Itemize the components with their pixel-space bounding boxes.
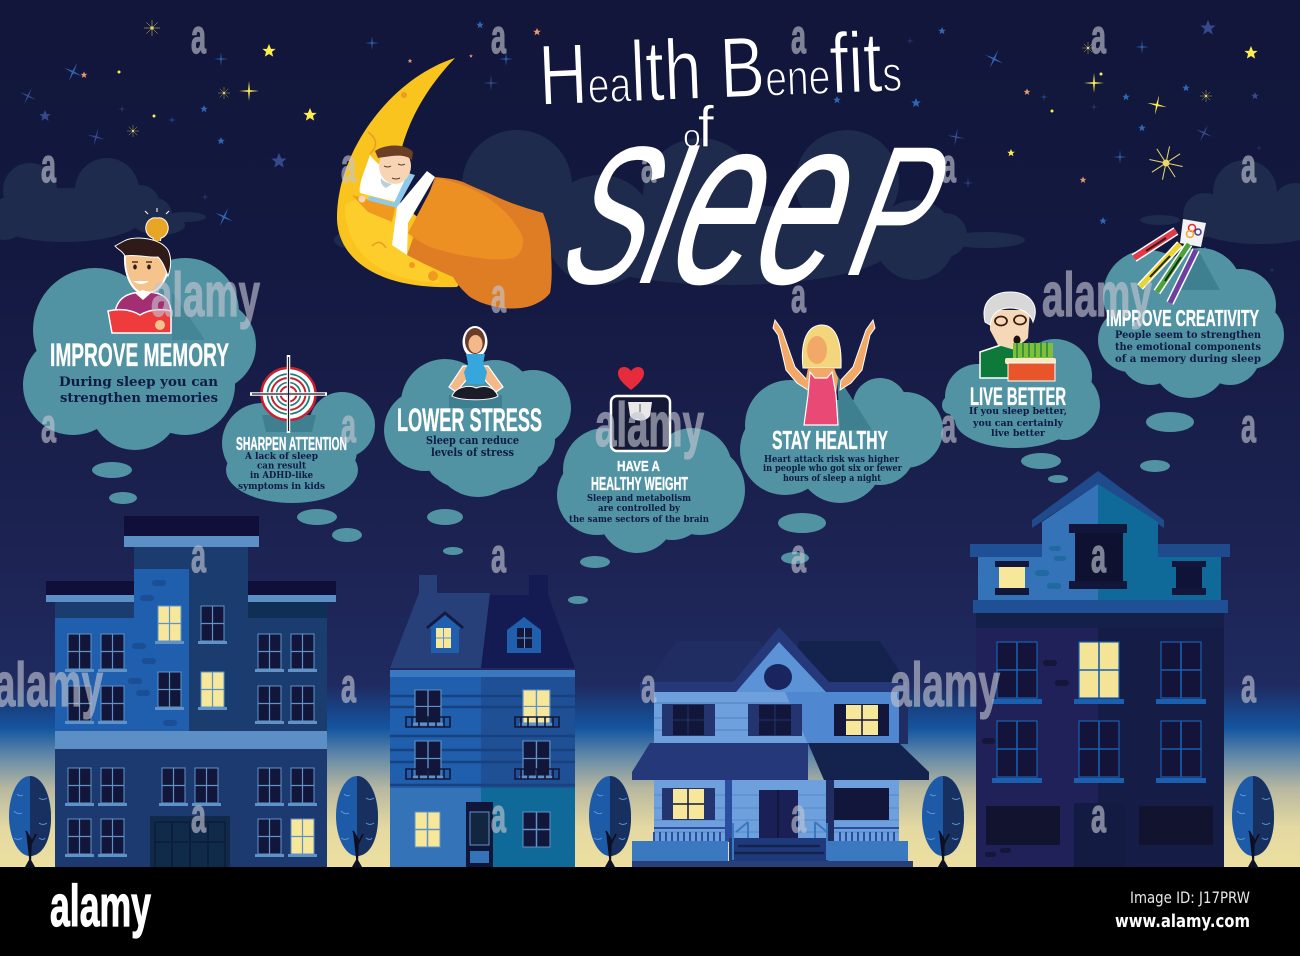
title: Sleep: P: [824, 109, 976, 315]
heading and text: can result: [257, 460, 307, 472]
thought cloud: stay healthy: [740, 320, 943, 503]
watermark words and letters over artwork: a: [641, 660, 656, 713]
watermark words and letters over artwork: a: [491, 270, 506, 323]
thought cloud: improve creativity: [1098, 219, 1284, 472]
watermark words and letters over artwork: alamy: [1042, 261, 1152, 330]
heading and text: IMPROVE MEMORY: [50, 337, 229, 373]
thought cloud: sharpen attention: [222, 355, 375, 542]
heading and text: A lack of sleep: [244, 451, 318, 462]
blanket: [392, 171, 552, 308]
watermark words and letters over artwork: a: [341, 400, 356, 453]
heading and text: [763, 425, 903, 484]
heading and text: of a memory during sleep: [1115, 353, 1261, 365]
dark cloud: behind title: [334, 130, 1025, 285]
icon: old man with birthday cake: [980, 292, 1056, 381]
watermark words and letters over artwork: a: [941, 400, 956, 453]
sleeping man: [358, 146, 415, 208]
footer bar: [0, 867, 1300, 956]
watermark letters: a: [491, 11, 506, 64]
stars: [16, 20, 1275, 273]
heading and text: During sleep you can: [59, 375, 219, 390]
title: of: of: [683, 95, 715, 160]
heading and text: [50, 337, 229, 406]
moon: [337, 58, 475, 287]
watermark words and letters over artwork: a: [41, 400, 56, 453]
heading and text: LIVE BETTER: [970, 383, 1066, 411]
heading and text: Heart attack risk was higher: [764, 454, 900, 465]
watermark words and letters over artwork: a: [491, 790, 506, 843]
dark cloud: right: [1140, 160, 1300, 244]
heading and text: [236, 434, 347, 492]
watermark words and letters over artwork: a: [1241, 660, 1256, 713]
watermark letters: a: [1091, 11, 1106, 64]
building 2: townhouse with dormers: [390, 575, 575, 867]
watermark words and letters over artwork: alamy: [151, 261, 260, 330]
heading and text: Sleep can reduce: [426, 434, 519, 447]
icon: man reading with light bulb: [108, 208, 205, 340]
thought cloud: improve memory: [23, 208, 256, 504]
watermark words and letters over artwork: alamy: [890, 651, 1000, 720]
heading and text: in people who got six or fewer: [763, 463, 903, 474]
watermark letters: a: [791, 11, 806, 64]
icon: target: [250, 355, 327, 433]
heading and text: symptoms in kids: [238, 481, 325, 492]
watermark words and letters over artwork: a: [1091, 530, 1106, 583]
watermark words and letters over artwork: a: [1241, 400, 1256, 453]
watermark words and letters over artwork: a: [791, 270, 806, 323]
trees: [9, 776, 1274, 867]
heading and text: LOWER STRESS: [397, 402, 542, 438]
footer bar: Image ID: J17PRW: [1130, 888, 1250, 907]
heading and text: the same sectors of the brain: [569, 514, 709, 525]
building 1: apartment block: [46, 516, 336, 867]
heading and text: [969, 383, 1067, 439]
footer bar: alamy: [50, 874, 151, 939]
icon: crayons and colour card: [1134, 219, 1220, 303]
heading and text: STAY HEALTHY: [772, 425, 888, 455]
heading and text: HEALTHY WEIGHT: [591, 474, 688, 494]
watermark letters: a: [641, 140, 656, 193]
thought cloud: lower stress: [384, 326, 571, 555]
heading and text: Sleep and metabolism: [587, 493, 691, 504]
watermark words and letters over artwork: a: [191, 530, 206, 583]
building 3: porch house: [632, 627, 929, 867]
watermark words and letters over artwork: a: [491, 530, 506, 583]
watermark words and letters over artwork: a: [341, 660, 356, 713]
icon: woman raising arms: [773, 320, 875, 430]
heading and text: in ADHD-like: [250, 470, 313, 481]
heading and text: the emotional components: [1115, 341, 1261, 353]
title: Health Benefits: Health Benefits: [537, 14, 903, 124]
icon: weighing scale: [611, 396, 670, 451]
heading and text: SHARPEN ATTENTION: [236, 434, 347, 454]
heading and text: you can certainly: [972, 418, 1063, 429]
heading and text: strengthen memories: [60, 391, 218, 406]
heading and text: live better: [991, 428, 1046, 439]
watermark words and letters over artwork: a: [1091, 790, 1106, 843]
building 4: tall house with gabled attic: [970, 471, 1230, 867]
title: Sleep: Slee: [536, 67, 902, 335]
heading and text: If you sleep better,: [969, 406, 1067, 417]
watermark letters: a: [41, 140, 56, 193]
watermark letters: [41, 11, 1256, 193]
watermark words and letters over artwork: a: [341, 140, 356, 193]
heading and text: [397, 402, 542, 459]
watermark words and letters over artwork: a: [191, 790, 206, 843]
heading and text: [569, 458, 709, 525]
watermark words and letters over artwork: [0, 140, 1256, 843]
watermark words and letters over artwork: a: [791, 790, 806, 843]
dark cloud: left: [0, 158, 206, 242]
heading and text: levels of stress: [431, 446, 514, 459]
heading and text: [1106, 305, 1261, 365]
watermark letters: a: [941, 140, 956, 193]
heading and text: hours of sleep a night: [783, 473, 882, 484]
watermark letters: a: [191, 11, 206, 64]
heading and text: are controlled by: [598, 503, 680, 514]
thought cloud: live better: [942, 292, 1100, 483]
watermark letters: a: [1241, 140, 1256, 193]
heading and text: People seem to strengthen: [1115, 329, 1261, 341]
footer bar: www.alamy.com: [1115, 911, 1250, 932]
thought cloud: healthy weight: [557, 367, 826, 604]
icon: meditating woman: [449, 326, 503, 408]
icon: heart: [618, 367, 644, 390]
watermark words and letters over artwork: alamy: [595, 391, 704, 460]
heading and text: HAVE A: [617, 458, 660, 475]
watermark words and letters over artwork: a: [791, 530, 806, 583]
